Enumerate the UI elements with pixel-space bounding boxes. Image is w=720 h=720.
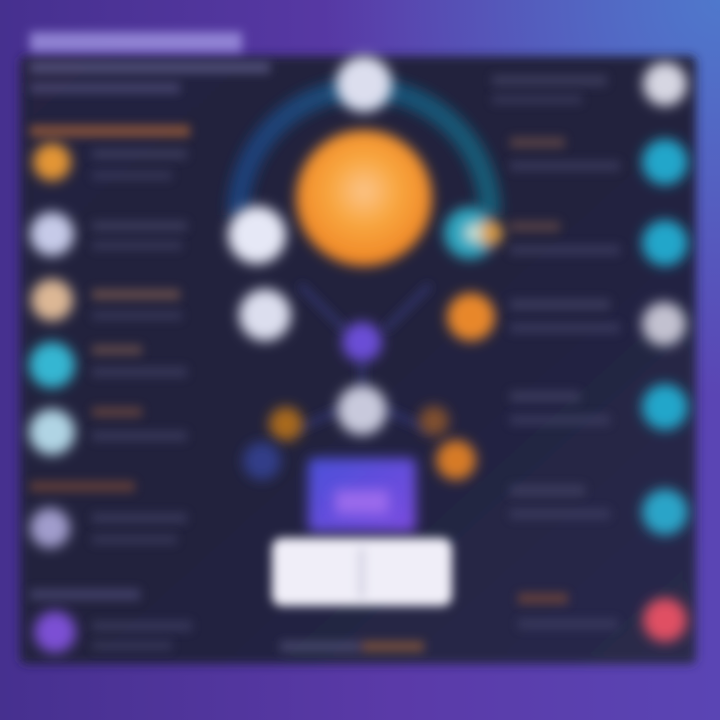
item: grey icon top [492, 62, 687, 106]
item: teal icon row [29, 342, 187, 388]
icon: small blue left [243, 442, 281, 480]
icon: left node [228, 206, 286, 264]
icon: top node [336, 56, 392, 112]
icon: right node [444, 207, 503, 259]
icon: central orange circle [296, 130, 432, 266]
icon: orange node right [447, 293, 495, 341]
panel: main dark card [20, 56, 696, 664]
faint connector lines [295, 285, 430, 430]
item: purple icon row [30, 589, 192, 653]
item: teal icon 2 [510, 220, 688, 266]
item: tan icon row [31, 279, 182, 321]
icon: purple node center [342, 322, 382, 362]
icon: small brown right [419, 406, 449, 436]
icon: grey node center [337, 385, 387, 435]
icon: laptop screen [308, 458, 416, 532]
heading: title block [30, 32, 270, 93]
item: grey icon middle [510, 299, 686, 346]
icon: laptop highlight [335, 490, 389, 514]
arc [238, 89, 490, 215]
item: red icon [518, 593, 687, 642]
item: grey lavender icon row [30, 481, 187, 548]
chart: central arc with nodes [228, 56, 503, 266]
item: teal icon 3 [510, 384, 688, 430]
item: orange icon row [30, 125, 190, 181]
icon: small orange left [269, 407, 303, 441]
chart: lower flow nodes [239, 285, 495, 652]
item: teal icon 4 [510, 485, 688, 535]
icon: orange right [436, 440, 476, 480]
panel: left column list [29, 125, 192, 653]
panel: right column list [492, 62, 688, 642]
caption: under box [280, 641, 424, 652]
item: teal icon 1 [510, 137, 688, 185]
item: pale blue icon row [29, 407, 187, 455]
item: pale lavender icon row [30, 212, 187, 256]
icon: white node left [239, 289, 291, 341]
callout: white box [272, 538, 452, 606]
